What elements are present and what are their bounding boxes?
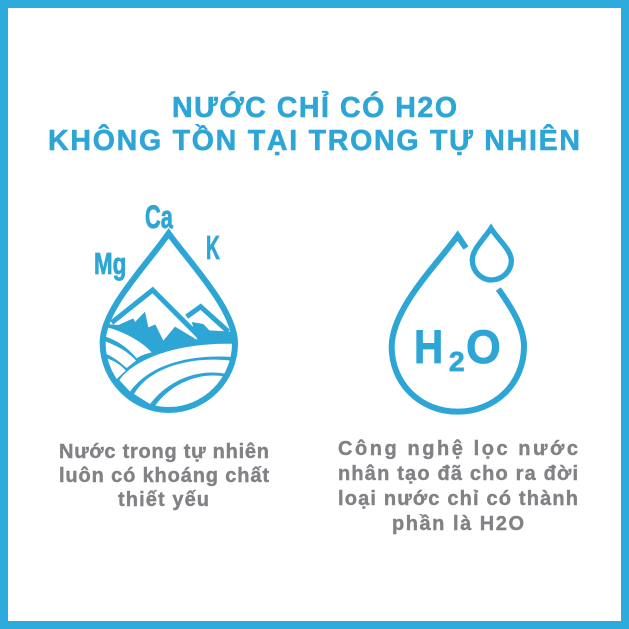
caption: natural water: Nước trong tự nhiên	[59, 441, 269, 463]
caption: filtered water	[338, 438, 578, 535]
caption: natural water	[59, 441, 269, 511]
small drop	[472, 228, 511, 280]
H2O label: 2	[449, 346, 465, 377]
H2O label: H	[414, 321, 443, 374]
large drop outline	[392, 236, 524, 412]
mineral label: Ca: Ca	[145, 199, 173, 235]
drop outline	[103, 233, 235, 410]
caption: filtered water: Công nghệ lọc nước	[338, 438, 578, 460]
mineral label: K: K	[206, 230, 220, 266]
caption: natural water: luôn có khoáng chất	[59, 465, 269, 487]
caption: filtered water: loại nước chỉ có thành	[338, 488, 578, 510]
title: KHÔNG TỒN TẠI TRONG TỰ NHIÊN	[48, 124, 580, 157]
icon: natural water drop with mountains	[97, 233, 240, 417]
title: NƯỚC CHỈ CÓ H2O	[172, 91, 457, 124]
icon: H2O water drop	[392, 228, 524, 412]
mineral label: Mg: Mg	[94, 246, 126, 281]
title	[48, 91, 580, 157]
caption: filtered water: phần là H2O	[392, 513, 524, 535]
caption: natural water: thiết yếu	[118, 489, 209, 511]
H2O label	[414, 321, 501, 377]
landscape inside the drop	[106, 286, 232, 406]
caption: filtered water: nhân tạo đã cho ra đời	[338, 463, 578, 485]
H2O label: O	[466, 321, 501, 373]
